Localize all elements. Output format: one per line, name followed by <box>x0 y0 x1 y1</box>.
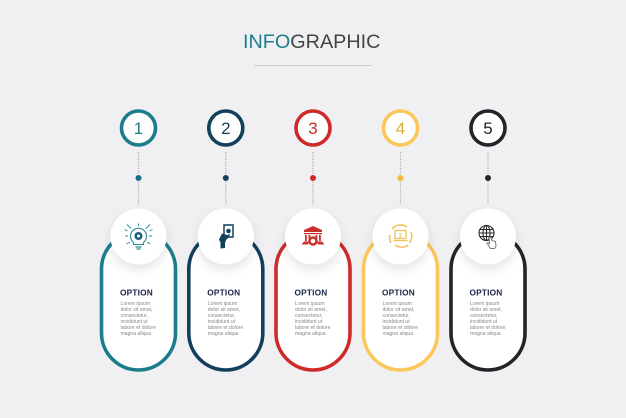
text 3: dolor sit amet, <box>295 307 327 313</box>
text 1: incididunt ut <box>120 319 148 325</box>
text 4: Lorem ipsum <box>382 301 412 307</box>
icon: hand with banknote <box>219 225 233 248</box>
text 2: magna aliqua <box>208 331 239 337</box>
number badge 3: 3 <box>308 119 318 138</box>
text 5: dolor sit amet, <box>470 307 502 313</box>
text 1: dolor sit amet, <box>120 307 152 313</box>
panel 4 <box>364 232 438 370</box>
text 1: OPTION <box>120 288 153 298</box>
number badge 4: 4 <box>396 119 405 138</box>
icon circle 2 <box>198 208 254 264</box>
number badge 1 <box>122 111 156 145</box>
panel 3 <box>276 232 350 370</box>
connector 4 <box>398 152 404 205</box>
text 4: dolor sit amet, <box>382 307 414 313</box>
column 4 <box>364 111 438 370</box>
text 1: labore et dolore <box>120 325 156 331</box>
connector 3 <box>310 152 316 205</box>
text 2: incididunt ut <box>208 319 236 325</box>
number badge 2 <box>209 111 243 145</box>
text 3 <box>294 288 331 337</box>
number badge 3 <box>296 111 330 145</box>
text 5: Lorem ipsum <box>470 301 499 307</box>
icon: laptop with cycle arrows: $ <box>399 233 403 239</box>
panel 2 <box>189 232 263 370</box>
connector 5 <box>485 152 491 205</box>
text 4: labore et dolore <box>382 325 418 331</box>
text 3: consectetur, <box>295 313 322 319</box>
text 2: dolor sit amet, <box>208 307 240 313</box>
column 3 <box>276 111 350 370</box>
number badge 5 <box>471 111 505 145</box>
text 1 <box>120 288 156 337</box>
text 3: labore et dolore <box>295 325 331 331</box>
text 2: labore et dolore <box>208 325 243 331</box>
text 5 <box>469 288 506 337</box>
panel 1 <box>102 232 176 370</box>
text 4: OPTION <box>382 288 415 298</box>
icon circle 4 <box>372 208 428 264</box>
text 4: incididunt ut <box>382 319 410 325</box>
text 3: magna aliqua <box>295 331 326 337</box>
connector 1 <box>136 152 142 205</box>
icon circle 3 <box>285 208 341 264</box>
text 3: Lorem ipsum <box>295 301 324 307</box>
text 1: consectetur, <box>120 313 148 319</box>
text 2: Lorem ipsum <box>208 301 237 307</box>
number badge 1: 1 <box>134 119 143 138</box>
text 2: OPTION <box>207 288 240 298</box>
text 5: OPTION <box>469 288 503 298</box>
text 4: consectetur, <box>382 313 410 319</box>
icon: light bulb <box>124 224 152 249</box>
text 5: labore et dolore <box>470 325 506 331</box>
icon circle 5 <box>460 208 516 264</box>
number badge 2: 2 <box>221 119 231 138</box>
text 1: Lorem ipsum <box>120 301 150 307</box>
column 1 <box>102 111 176 370</box>
title: INFOGRAPHIC <box>243 31 380 53</box>
connector 2 <box>223 152 229 205</box>
text 2: consectetur, <box>208 313 235 319</box>
column 2 <box>189 111 263 370</box>
title <box>243 31 380 66</box>
text 2 <box>207 288 243 337</box>
panel 5 <box>451 232 525 370</box>
number badge 5: 5 <box>483 119 493 138</box>
text 4: magna aliqua <box>382 331 413 337</box>
icon circle 1 <box>110 208 166 264</box>
column 5 <box>451 111 525 370</box>
text 4 <box>382 288 418 337</box>
text 3: incididunt ut <box>295 319 323 325</box>
text 3: OPTION <box>294 288 328 298</box>
number badge 4 <box>384 111 418 145</box>
icon: bank with gear <box>302 226 324 244</box>
text 5: magna aliqua <box>470 331 501 337</box>
icon: globe with pointer hand <box>479 226 496 248</box>
text 5: consectetur, <box>470 313 497 319</box>
text 5: incididunt ut <box>470 319 498 325</box>
text 1: magna aliqua <box>120 331 151 337</box>
